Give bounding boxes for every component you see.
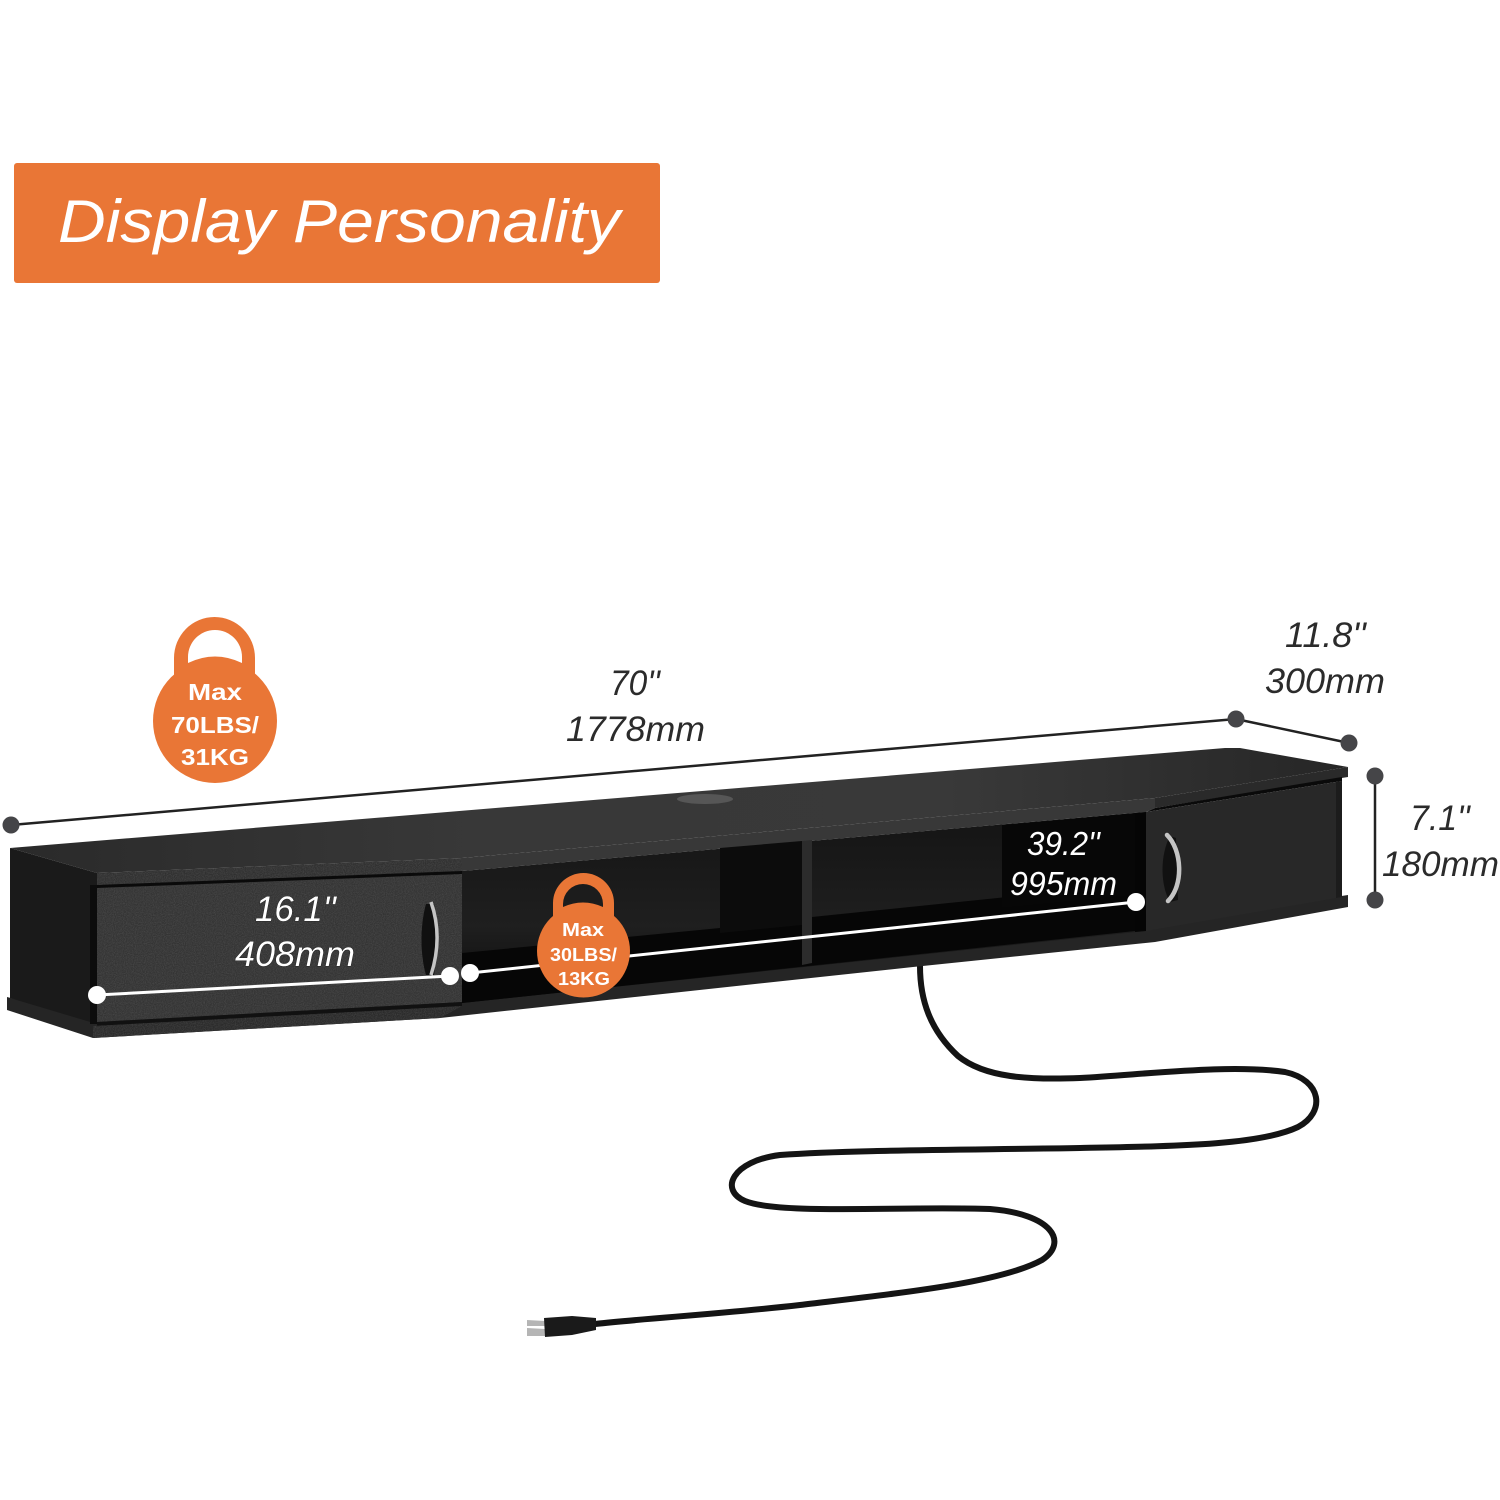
- weight badge: max 30 lbs: [537, 873, 630, 998]
- weight badge: max 70 lbs: 70LBS/: [171, 712, 260, 738]
- label: height: 180mm: [1382, 845, 1499, 884]
- right inner side: [1135, 812, 1146, 932]
- label: compartment width: 39.2'': [1027, 825, 1102, 862]
- dimension line: left door width: [88, 967, 459, 1004]
- left side panel: [10, 848, 97, 1024]
- label: depth: 11.8'': [1285, 616, 1367, 655]
- middle top front edge: [462, 798, 1155, 871]
- shelf top surface: [10, 748, 1348, 873]
- left door handle: [422, 902, 437, 975]
- dimension line: compartment width: [461, 893, 1145, 982]
- open compartments: [462, 812, 1146, 1003]
- weight badge: max 70 lbs: [153, 617, 277, 783]
- label: compartment width: 995mm: [1010, 865, 1117, 902]
- compartment floor: [462, 884, 1135, 1003]
- black rear panel: [720, 841, 802, 933]
- label: overall width: [566, 664, 705, 749]
- cable grommet: [677, 794, 733, 804]
- plinth front: [93, 1006, 462, 1038]
- label: compartment width: [1010, 825, 1117, 902]
- label: overall width: 70'': [610, 664, 661, 703]
- weight badge: max 70 lbs: Max: [188, 679, 242, 705]
- dimension line: height: [1366, 768, 1384, 908]
- right top slab front edge: [1155, 767, 1348, 808]
- centre divider: [802, 840, 812, 965]
- right black window: [1002, 813, 1136, 908]
- heading banner: Display Personality: Display Personality: [58, 188, 624, 255]
- dimension line: overall width and depth: [2, 710, 1358, 834]
- TV shelf unit: [7, 748, 1348, 1038]
- label: left door width: 16.1'': [255, 890, 337, 929]
- door top shadow line: [97, 871, 462, 888]
- label: overall width: 1778mm: [566, 710, 705, 749]
- weight badge: max 70 lbs: 31KG: [181, 744, 249, 770]
- right door handle: [1162, 835, 1179, 902]
- label: left door width: [235, 890, 355, 974]
- label: height: [1382, 799, 1499, 884]
- weight badge: max 30 lbs: 13KG: [558, 969, 610, 989]
- label: depth: 300mm: [1265, 662, 1385, 701]
- plug: [527, 1316, 596, 1337]
- weight badge: max 30 lbs: Max: [562, 920, 604, 940]
- right door: [1146, 781, 1342, 931]
- label: left door width: 408mm: [235, 935, 355, 974]
- left top slab front edge: [97, 858, 462, 887]
- label: depth: [1265, 616, 1385, 701]
- heading banner: Display Personality: [14, 163, 660, 283]
- bottom slab: [7, 895, 1348, 1038]
- power cord with plug: [527, 966, 1316, 1337]
- left door: [90, 871, 462, 1026]
- label: height: 7.1'': [1410, 799, 1471, 838]
- weight badge: max 30 lbs: 30LBS/: [550, 945, 617, 965]
